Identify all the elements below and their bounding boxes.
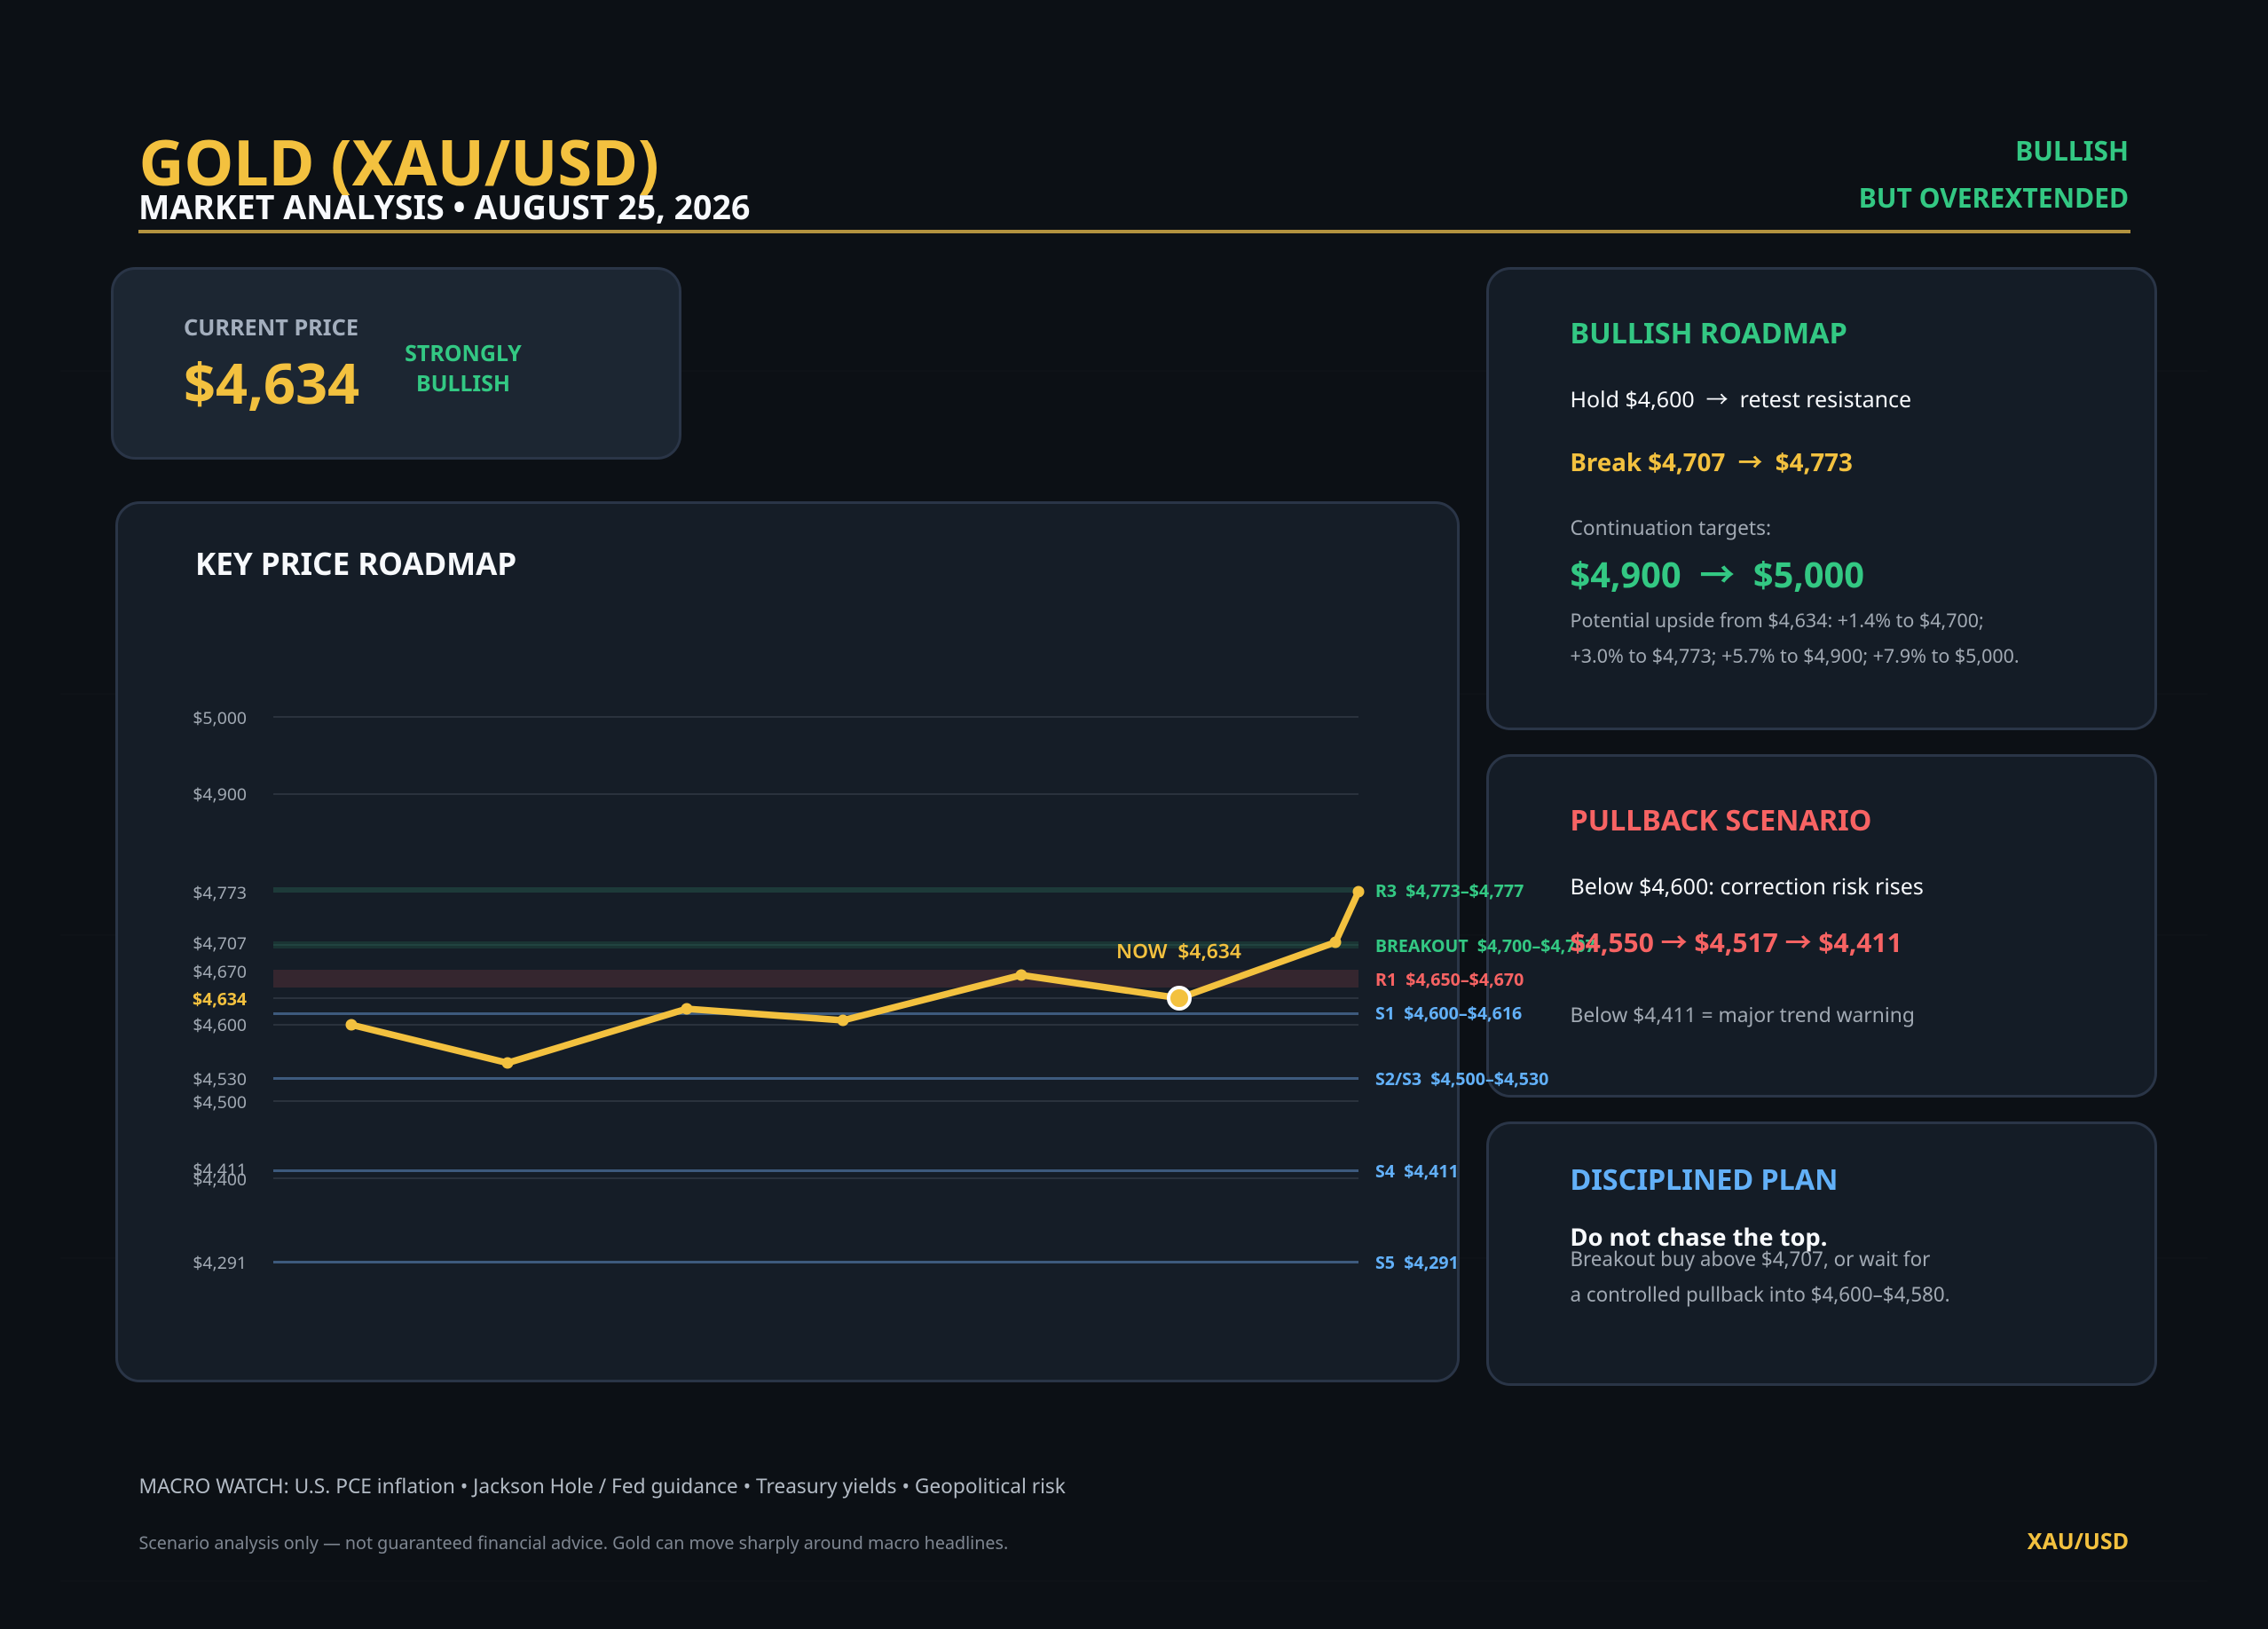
break line: Break $4,707 → $4,773 xyxy=(1571,445,1853,479)
status: bullish but overextended xyxy=(1859,132,2129,216)
level labels: R1 $4,650–$4,670 xyxy=(1375,967,1524,991)
level labels: S4 $4,411 xyxy=(1375,1159,1459,1183)
disclaimer: Scenario analysis only — not guaranteed financial advice. Gold can move sharply around macro headlines. xyxy=(138,1531,1008,1554)
panel: disciplined plan xyxy=(1487,1123,2156,1384)
footer xyxy=(138,1472,2129,1556)
y axis labels: $4,707 xyxy=(193,931,247,955)
plan details xyxy=(1571,1245,1950,1308)
level bands xyxy=(273,887,1358,1263)
chart xyxy=(193,705,1595,1274)
panel: pullback scenario background xyxy=(1487,756,2156,1097)
sentiment: strongly bullish: STRONGLY xyxy=(405,338,522,368)
sentiment: strongly bullish xyxy=(405,338,522,398)
plan details: Breakout buy above $4,707, or wait for xyxy=(1571,1245,1930,1272)
current price marker xyxy=(1169,988,1190,1009)
panel: key price roadmap xyxy=(117,502,1595,1381)
panel: bullish roadmap xyxy=(1487,268,2156,729)
y axis labels: $4,670 xyxy=(193,959,247,983)
status: bullish but overextended: BUT OVEREXTENDED xyxy=(1859,179,2129,216)
y axis labels: $4,634 xyxy=(193,987,247,1011)
upside note: Potential upside from $4,634: +1.4% to $4,700; xyxy=(1571,608,1984,634)
correction risk line: Below $4,600: correction risk rises xyxy=(1571,871,1924,901)
upside note: +3.0% to $4,773; +5.7% to $4,900; +7.9% to $5,000. xyxy=(1571,643,2020,669)
y axis labels: $4,500 xyxy=(193,1090,247,1114)
hold line: Hold $4,600 → retest resistance xyxy=(1571,384,1911,414)
level labels xyxy=(1375,878,1595,1274)
heading: bullish roadmap: BULLISH ROADMAP xyxy=(1571,312,1847,352)
plan headline: Do not chase the top. xyxy=(1571,1220,1827,1253)
title: GOLD (XAU/USD) xyxy=(138,119,659,204)
status: bullish but overextended: BULLISH xyxy=(2015,132,2129,169)
continuation targets: $4,900 → $5,000 xyxy=(1571,549,1864,598)
y axis labels: $4,773 xyxy=(193,880,247,904)
y axis labels: $4,600 xyxy=(193,1012,247,1036)
y axis labels: $4,900 xyxy=(193,782,247,806)
plan details: a controlled pullback into $4,600–$4,580. xyxy=(1571,1280,1950,1308)
level labels: BREAKOUT $4,700–$4,707 xyxy=(1375,933,1595,957)
y axis labels: $4,411 xyxy=(193,1157,247,1181)
current price value: $4,634 xyxy=(184,345,359,421)
macro watch: MACRO WATCH: U.S. PCE inflation • Jackson Hole / Fed guidance • Treasury yields • Geopolitical risk xyxy=(138,1472,1066,1499)
level labels: S2/S3 $4,500–$4,530 xyxy=(1375,1066,1548,1090)
level labels: S5 $4,291 xyxy=(1375,1250,1459,1274)
ticker tag: XAU/USD xyxy=(2028,1526,2129,1556)
current price label: CURRENT PRICE xyxy=(184,312,358,342)
panel: current price xyxy=(112,268,680,458)
y axis labels: $5,000 xyxy=(193,705,247,729)
upside note xyxy=(1571,608,2020,669)
panel: pullback scenario text xyxy=(1571,800,1924,1028)
price grid lines xyxy=(273,717,1358,1178)
y axis labels xyxy=(193,705,247,1274)
sentiment: strongly bullish: BULLISH xyxy=(416,368,510,398)
header xyxy=(138,119,2130,233)
heading: pullback scenario: PULLBACK SCENARIO xyxy=(1571,800,1871,839)
y axis labels: $4,530 xyxy=(193,1066,247,1090)
downside targets: $4,550 → $4,517 → $4,411 xyxy=(1571,924,1902,960)
header rule xyxy=(138,230,2130,233)
y axis labels: $4,291 xyxy=(193,1250,247,1274)
now label: NOW $4,634 xyxy=(1116,937,1241,964)
trend warning: Below $4,411 = major trend warning xyxy=(1571,1001,1915,1028)
continuation label: Continuation targets: xyxy=(1571,514,1771,541)
chart heading: KEY PRICE ROADMAP xyxy=(195,543,516,585)
level labels: R3 $4,773–$4,777 xyxy=(1375,878,1524,902)
y axis labels: $4,400 xyxy=(193,1167,247,1191)
subtitle: MARKET ANALYSIS • AUGUST 25, 2026 xyxy=(138,184,750,229)
price line xyxy=(346,885,1365,1068)
heading: disciplined plan: DISCIPLINED PLAN xyxy=(1571,1160,1838,1199)
level labels: S1 $4,600–$4,616 xyxy=(1375,1001,1522,1025)
